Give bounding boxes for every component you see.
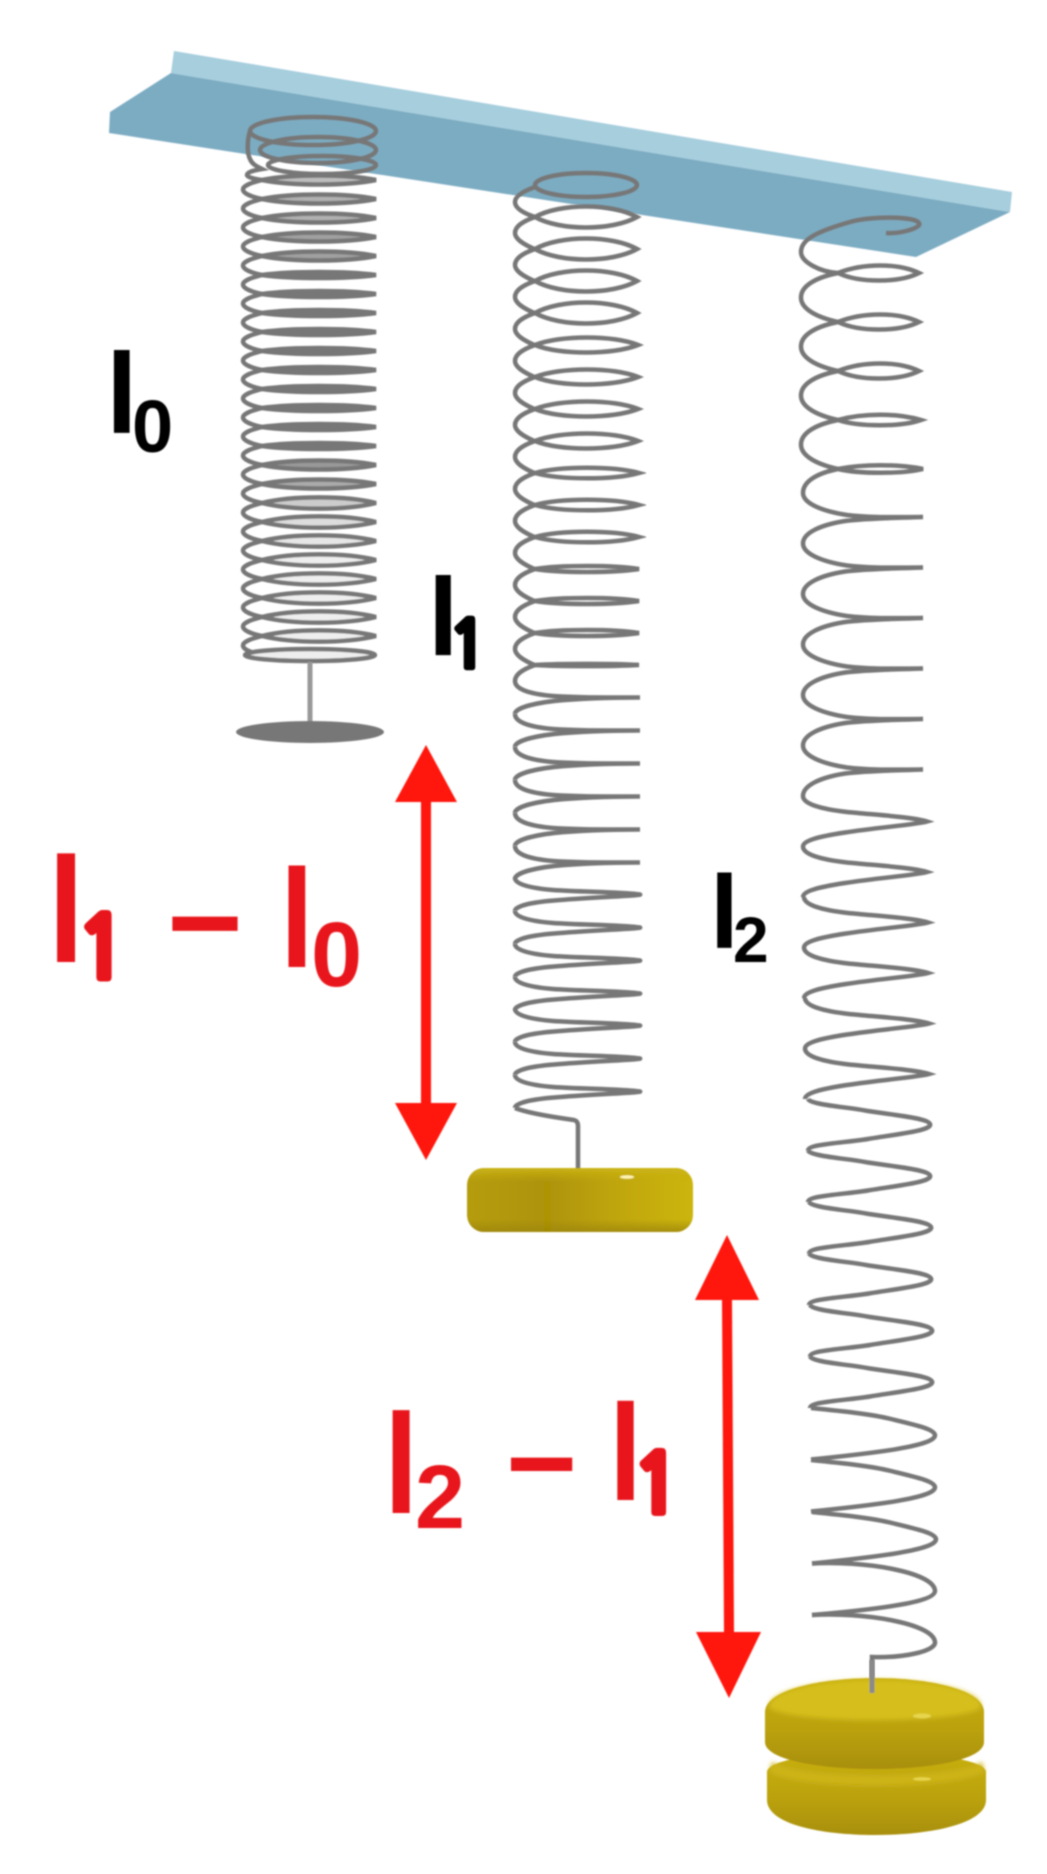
label l2: l	[710, 855, 739, 971]
red label l2 minus l1: l	[609, 1377, 642, 1530]
red label l1 minus l0: l	[280, 840, 314, 997]
red label l1 minus l0: 0	[311, 904, 362, 1006]
red double arrow l1 minus l0	[395, 745, 457, 1160]
double yellow weight on spring l2	[765, 1660, 986, 1835]
spring l0 with empty hanger	[236, 117, 384, 743]
red label l2 minus l1	[384, 1377, 682, 1548]
spring l2	[801, 218, 936, 1693]
label l2: 2	[733, 904, 769, 976]
label l2	[710, 855, 769, 976]
label l0	[106, 331, 173, 468]
label l0: l	[106, 331, 138, 458]
red label l1 minus l0: −	[167, 849, 243, 995]
label l1: 1	[448, 612, 488, 678]
label l0: 0	[132, 385, 173, 468]
ceiling support bar	[109, 51, 1012, 257]
red label l1 minus l0	[48, 826, 362, 1006]
red label l1 minus l0: l	[48, 826, 84, 994]
red label l2 minus l1: −	[506, 1395, 577, 1531]
label l1	[428, 556, 488, 679]
red label l2 minus l1: l	[384, 1386, 418, 1544]
red label l2 minus l1: 1	[632, 1445, 682, 1526]
label l1: l	[428, 556, 459, 679]
red label l1 minus l0: 1	[76, 906, 128, 991]
spring l1	[515, 173, 640, 1170]
single yellow weight on spring l1	[467, 1168, 693, 1232]
red double arrow l2 minus l1	[695, 1235, 761, 1698]
red label l2 minus l1: 2	[415, 1448, 465, 1548]
